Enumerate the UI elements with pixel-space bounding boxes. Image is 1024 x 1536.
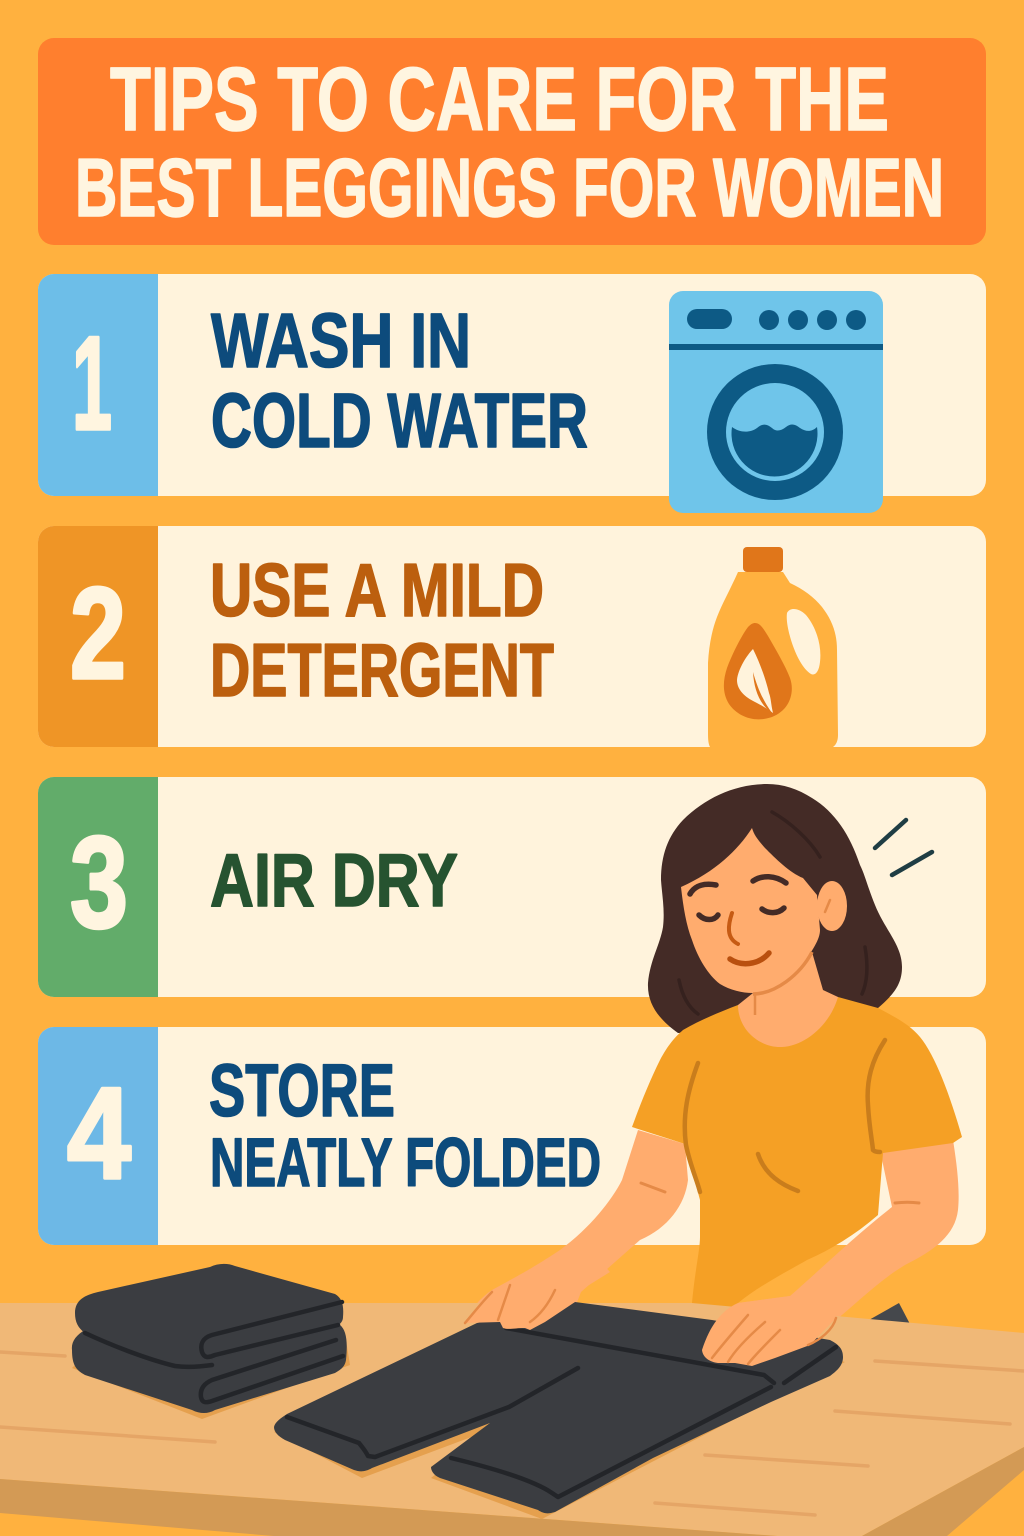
shirt folds [685,1040,885,1192]
panel: step 4 store neatly folded: STORE [209,1049,395,1132]
panel: step 3 air dry: AIR DRY [210,838,458,922]
neck crease [753,952,812,1015]
panel: step 4 store neatly folded: NEATLY FOLDED [210,1124,601,1201]
panel: step 4 store neatly folded [38,1027,986,1245]
ear [817,881,847,931]
shirt [632,997,962,1320]
panel: step 2 use a mild detergent: 2 [70,560,126,706]
leggings on table [274,1302,845,1519]
folded leggings stack [72,1264,350,1419]
panel: step 1 wash in cold water [38,274,986,496]
woman folding leggings [464,784,962,1365]
panel: step 3 air dry: 3 [70,809,128,955]
table [0,1303,1024,1536]
panel: step 2 use a mild detergent [38,526,986,747]
facial features [690,877,786,964]
hair [648,784,902,1033]
panel: step 2 use a mild detergent: DETERGENT [210,628,554,712]
face [681,828,820,993]
icon: washing machine [669,291,883,513]
panel: step 1 wash in cold water: COLD WATER [211,378,588,464]
panel: step 1 wash in cold water: WASH IN [211,298,471,384]
title banner [38,38,986,245]
panel: step 3 air dry [38,777,986,997]
arm creases [641,1183,919,1203]
icon: detergent bottle [708,547,838,747]
panel: step 4 store neatly folded: 4 [67,1060,131,1206]
right arm [702,1140,959,1365]
left arm [464,1130,688,1330]
dark top under shirt [860,1303,911,1326]
neck [738,952,850,1060]
hair highlights [679,812,867,1014]
motion lines [875,820,932,875]
panel: step 1 wash in cold water: 1 [72,310,112,458]
panel: step 2 use a mild detergent: USE A MILD [210,548,544,632]
hands on leggings [465,1250,836,1366]
